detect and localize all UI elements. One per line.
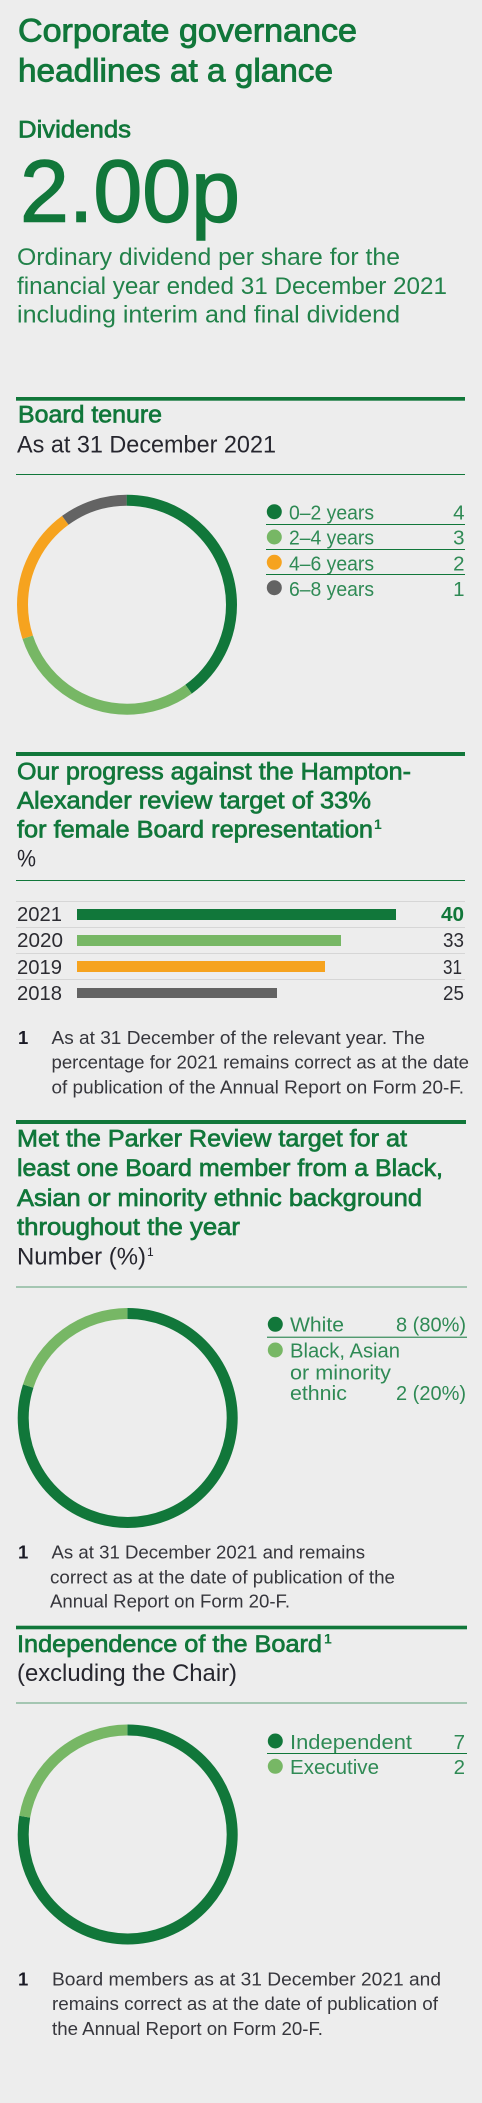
heading: Hampton-Alexander target: Our progress against the Hampton- <box>17 758 411 785</box>
bar chart: female representation: 33 <box>443 929 464 952</box>
unit label: % <box>17 846 36 872</box>
legend: independence: 7 <box>454 1731 465 1754</box>
donut chart: independence <box>23 1730 232 1939</box>
heading: Parker Review target: throughout the year <box>17 1214 240 1241</box>
footnote: Hampton-Alexander <box>18 1027 469 1097</box>
footnote: Hampton-Alexander: of publication of the Annual Report on Form 20-F. <box>52 1076 464 1097</box>
bar chart: female representation: 2021 <box>17 903 62 926</box>
legend: board tenure: 4–6 years <box>289 552 374 576</box>
footnote: Hampton-Alexander: 1 <box>18 1027 28 1048</box>
panel: independence of the board <box>16 1630 467 2039</box>
heading: dividends: Dividends <box>18 116 131 144</box>
footnote: independence: remains correct as at the date of publication of <box>52 1993 439 2014</box>
bar chart: female representation: 25 <box>443 982 464 1005</box>
bar chart: female representation: 31 <box>443 956 462 979</box>
title: Corporate governance <box>18 12 357 48</box>
bar chart: female representation: 2019 <box>17 956 62 979</box>
donut chart: ethnicity <box>23 1314 232 1522</box>
legend: ethnicity: White <box>290 1314 344 1337</box>
heading: Parker Review target: Asian or minority ethnic background <box>17 1185 422 1212</box>
heading: Hampton-Alexander target: 1 <box>374 816 382 832</box>
heading: board tenure: Board tenure <box>18 402 162 428</box>
heading: independence: Independence of the Board <box>17 1631 322 1658</box>
heading: Parker Review target <box>17 1126 443 1241</box>
legend: ethnicity: 8 (80%) <box>396 1314 466 1337</box>
subheading: as at date: As at 31 December 2021 <box>17 432 276 458</box>
title: headlines at a glance <box>18 52 333 88</box>
legend: board tenure: 6–8 years <box>289 578 374 601</box>
footnote: independence: 1 <box>18 1968 28 1989</box>
heading: Hampton-Alexander target: for female Board representation <box>17 816 373 843</box>
footnote: Parker Review <box>18 1541 395 1612</box>
footnote: Hampton-Alexander: percentage for 2021 remains correct as at the date <box>52 1051 469 1072</box>
footnote: independence: the Annual Report on Form 20-F. <box>52 2018 323 2039</box>
footnote: Parker Review: As at 31 December 2021 and remains <box>52 1541 365 1562</box>
legend: ethnicity: or minority <box>290 1361 392 1384</box>
legend: independence: 2 <box>454 1756 465 1779</box>
big number: 2.00p: 2.00p <box>20 142 240 240</box>
footnote: Parker Review: 1 <box>18 1541 28 1562</box>
footnote: Hampton-Alexander: As at 31 December of the relevant year. The <box>52 1027 425 1048</box>
title <box>18 12 357 88</box>
donut chart: board tenure <box>22 500 232 709</box>
legend: independence: Executive <box>290 1756 379 1779</box>
heading: Hampton-Alexander target: Alexander review target of 33% <box>17 787 371 814</box>
legend: board tenure: 3 <box>453 527 464 550</box>
footnote: Parker Review: Annual Report on Form 20-F. <box>50 1591 290 1612</box>
heading: Parker Review target: Met the Parker Review target for at <box>17 1126 407 1153</box>
legend: board tenure <box>266 501 465 601</box>
text: dividend description <box>17 244 447 328</box>
heading: Parker Review target: least one Board member from a Black, <box>17 1155 443 1182</box>
heading: independence: 1 <box>324 1630 332 1646</box>
footnote: Parker Review: correct as at the date of publication of the <box>50 1566 395 1587</box>
heading: Hampton-Alexander target <box>17 758 411 843</box>
text: dividend description: financial year ended 31 December 2021 <box>17 273 447 300</box>
legend: ethnicity: ethnic <box>290 1382 347 1405</box>
text: dividend description: including interim and final dividend <box>17 302 400 328</box>
subheading: number percent: 1 <box>147 1245 154 1259</box>
subheading: excluding the chair: (excluding the Chair) <box>17 1660 237 1687</box>
legend: independence <box>267 1731 467 1779</box>
panel: Parker Review <box>16 1126 467 1612</box>
legend: board tenure: 2–4 years <box>289 527 374 550</box>
panel: dividends <box>17 116 447 328</box>
subheading: number percent: Number (%) <box>17 1243 146 1270</box>
bar chart: female representation: 2018 <box>17 982 62 1005</box>
legend: independence: Independent <box>290 1731 412 1754</box>
panel: Hampton-Alexander progress <box>16 758 469 1097</box>
legend: ethnicity <box>267 1314 467 1405</box>
footnote: independence: Board members as at 31 December 2021 and <box>52 1968 441 1989</box>
legend: ethnicity: Black, Asian <box>290 1340 400 1363</box>
legend: ethnicity: 2 (20%) <box>396 1382 466 1405</box>
panel: board tenure <box>16 402 465 709</box>
legend: board tenure: 2 <box>453 552 464 576</box>
text: dividend description: Ordinary dividend per share for the <box>17 244 400 271</box>
legend: board tenure: 0–2 years <box>289 501 374 524</box>
bar chart: female representation <box>16 901 465 1005</box>
legend: board tenure: 1 <box>453 578 464 601</box>
bar chart: female representation: 40 <box>441 903 464 926</box>
bar chart: female representation: 2020 <box>17 929 63 952</box>
legend: board tenure: 4 <box>453 501 464 524</box>
footnote: independence <box>18 1968 441 2039</box>
